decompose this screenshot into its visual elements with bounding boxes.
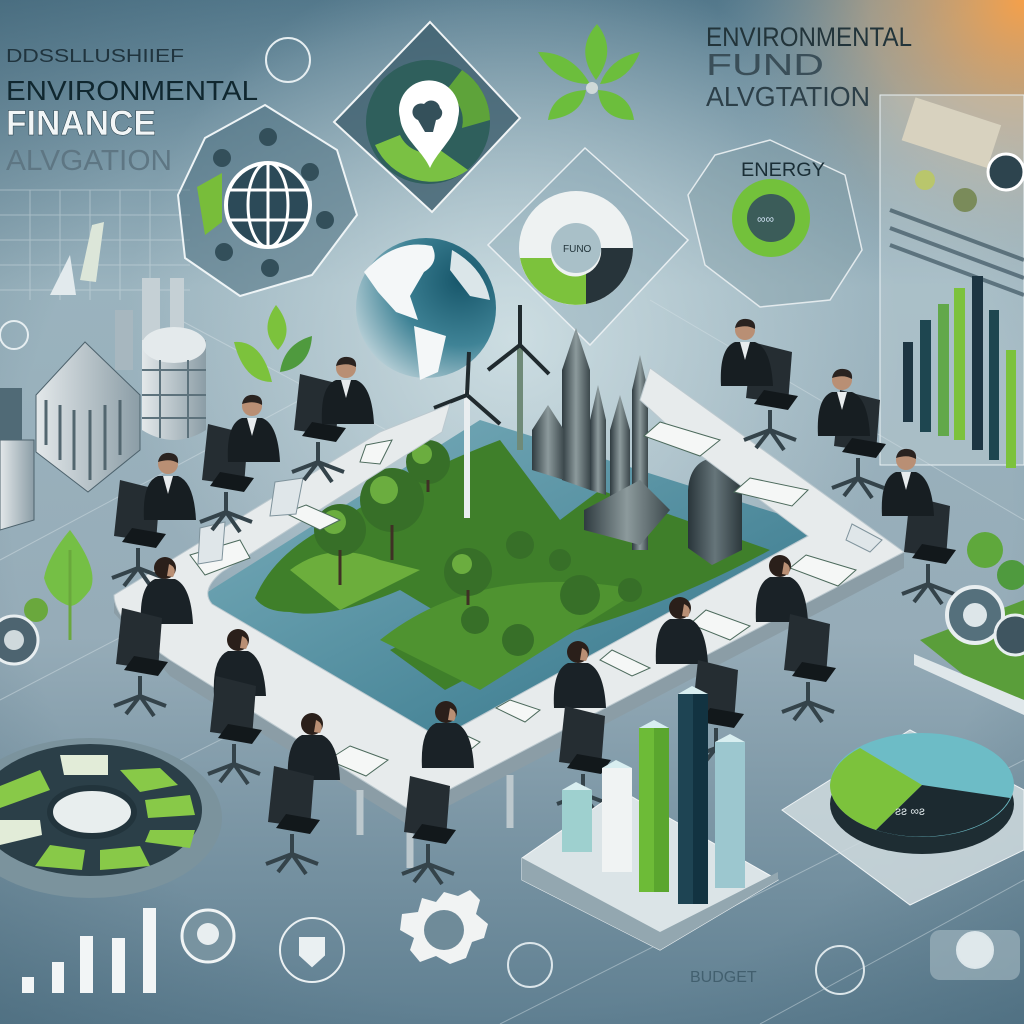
icon: coin left <box>0 616 38 664</box>
icon: energy badge <box>688 140 862 307</box>
right dashboard glass panel <box>880 95 1024 465</box>
icon: small tiles left <box>50 222 104 295</box>
icon: light bulb badge <box>334 22 520 212</box>
buildings left <box>0 278 206 530</box>
icon: earth globe <box>356 238 496 380</box>
icon: green leaf left <box>24 530 92 640</box>
title: environmental fund allocation: FUND <box>706 47 824 82</box>
icon: gear <box>400 890 488 964</box>
title: environmental finance allocation: DDSSLLUSHIIEF <box>6 46 184 66</box>
bar chart: upper right <box>903 276 1016 468</box>
team: chairs and people <box>112 319 956 884</box>
island: green park with water <box>195 420 830 750</box>
title: environmental finance allocation: FINANCE <box>6 104 156 143</box>
title: environmental finance allocation <box>6 46 258 177</box>
title: environmental fund allocation: ENVIRONMENTAL <box>706 22 912 52</box>
laptops <box>198 478 882 564</box>
pie chart platform: ƨƨ ∞ƨ <box>895 804 925 818</box>
icon: bottom circles <box>508 930 1020 994</box>
icon: donut fund chart <box>488 148 688 345</box>
conference table <box>114 368 904 868</box>
title: environmental finance allocation: ALVGATION <box>6 145 172 177</box>
icon: energy badge: ENERGY <box>741 160 825 181</box>
green plants right <box>914 532 1024 715</box>
castle city towers <box>532 328 742 565</box>
icon: coin bottom <box>182 910 234 962</box>
trees <box>314 440 642 656</box>
title: environmental finance allocation: ENVIRONMENTAL <box>6 75 258 106</box>
icon: donut fund chart: FUNO <box>563 244 592 255</box>
pie chart platform <box>782 730 1024 905</box>
icon: small green leaves <box>234 305 312 382</box>
small icons left <box>0 38 310 349</box>
wind turbines <box>434 305 549 518</box>
bar chart: 3D bars on platform <box>522 686 778 950</box>
icon: energy badge: ∞∞ <box>757 212 774 226</box>
radial wheel left <box>0 738 222 898</box>
icon: green leaves flower <box>538 24 640 120</box>
icon: globe badge <box>178 105 357 296</box>
title: environmental fund allocation <box>706 22 912 112</box>
budget label: BUDGET <box>690 969 757 986</box>
documents on the table <box>190 422 856 776</box>
bar chart: bottom left white bars <box>22 908 156 993</box>
icon: shield <box>280 918 344 982</box>
title: environmental fund allocation: ALVGTATION <box>706 81 870 112</box>
